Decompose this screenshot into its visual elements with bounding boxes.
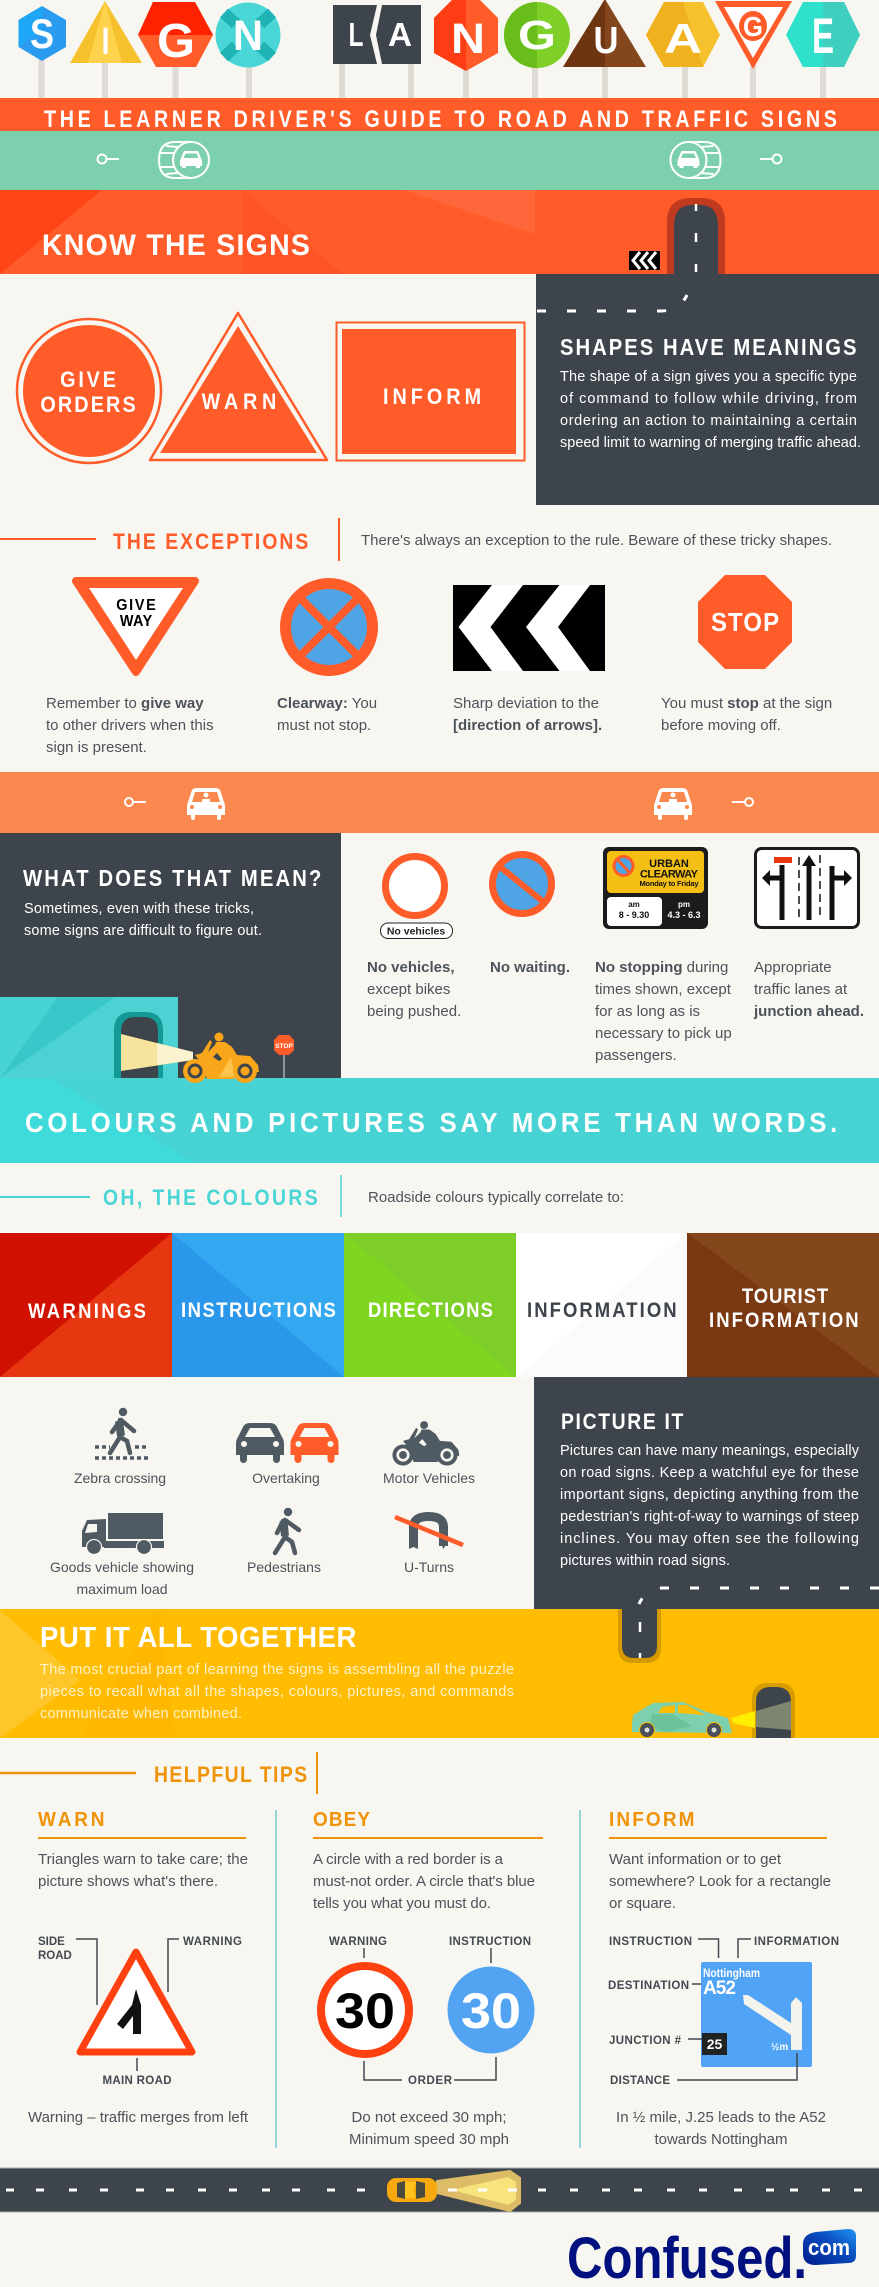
- speed sign labels: ORDER: [408, 2075, 453, 2087]
- road tunnel: [667, 198, 725, 274]
- sign: urban clearway: 4.3 - 6.3: [667, 910, 701, 920]
- orange band with car icons: [0, 772, 879, 833]
- sign captions: necessary to pick up: [595, 1025, 732, 1042]
- section heading: the exceptions: THE EXCEPTIONS: [113, 530, 309, 554]
- icon captions: Goods vehicle showing: [50, 1559, 194, 1575]
- column: inform: INFORM: [609, 1809, 695, 1831]
- panel: picture it: inclines. You may often see the following: [560, 1531, 859, 1547]
- sign: urban clearway: 8 - 9.30: [619, 910, 649, 920]
- column: inform: towards Nottingham: [654, 2131, 788, 2148]
- panel: tourist information: INFORMATION: [709, 1309, 859, 1332]
- sign: urban clearway: pm: [678, 900, 690, 909]
- column: warn: Warning – traffic merges from left: [28, 2109, 249, 2126]
- panel: what does that mean: some signs are difficult to figure out.: [24, 923, 262, 939]
- panel: tourist information: TOURIST: [742, 1285, 828, 1308]
- panel: what does that mean: WHAT DOES THAT MEAN?: [23, 865, 321, 891]
- exception: give way sign: WAY: [120, 612, 152, 630]
- small stop sign: STOP: [275, 1043, 293, 1050]
- icon: zebra crossing: [95, 1408, 148, 1458]
- column: inform: or square.: [609, 1895, 676, 1912]
- sign letter G: [138, 2, 213, 68]
- direction sign labels: DISTANCE: [610, 2075, 670, 2087]
- sign letter A: A: [388, 16, 412, 53]
- sign letter L: L: [348, 16, 364, 53]
- icon: motor vehicles: [392, 1421, 459, 1466]
- section banner: put it all together: The most crucial part of learning the signs is assembling all the puzzle: [40, 1662, 514, 1678]
- exception captions: [direction of arrows].: [453, 717, 602, 734]
- column: obey: [313, 1809, 543, 2148]
- tunnel and car: [632, 1683, 795, 1738]
- circle sign: give orders: GIVE: [60, 368, 116, 392]
- sign letter I: [70, 1, 142, 63]
- direction sign: A52: [703, 1978, 736, 1999]
- column: obey: tells you what you must do.: [313, 1895, 491, 1912]
- sign letter N: N: [233, 12, 263, 60]
- sign captions: being pushed.: [367, 1003, 461, 1020]
- exception: give way sign: [76, 581, 195, 672]
- sign: no vehicles: [380, 856, 452, 938]
- column: obey: A circle with a red border is a: [313, 1851, 504, 1868]
- icon captions: Motor Vehicles: [383, 1470, 475, 1486]
- sign captions: No waiting.: [490, 959, 570, 976]
- small stop sign: [274, 1035, 294, 1078]
- chevron road sign: [629, 251, 660, 270]
- sign letter N: [434, 0, 498, 71]
- body text: speed limit to warning of merging traffic ahead.: [560, 435, 861, 451]
- road with car: [0, 2168, 879, 2212]
- sign: urban clearway: CLEARWAY: [640, 868, 699, 880]
- exception captions: before moving off.: [661, 717, 781, 734]
- column: inform: [608, 1809, 839, 2148]
- section banner: put it all together: pieces to recall what all the shapes, colours, pictures, and commands: [40, 1684, 514, 1700]
- motorbike: [183, 1032, 259, 1083]
- warning sign labels: SIDE: [38, 1936, 65, 1948]
- column: warn: WARN: [38, 1809, 105, 1831]
- heading: SHAPES HAVE MEANINGS: [560, 334, 857, 360]
- sign letter L: [333, 5, 377, 64]
- direction sign labels: JUNCTION #: [609, 2035, 682, 2047]
- exception: give way sign: GIVE: [116, 596, 156, 614]
- icon captions: maximum load: [76, 1581, 168, 1597]
- triangle sign: warn: [150, 313, 327, 460]
- sign letter G: G: [743, 11, 763, 42]
- sign captions: passengers.: [595, 1047, 677, 1064]
- icon captions: [50, 1470, 475, 1597]
- body text: [560, 369, 861, 451]
- panel: picture it: [534, 1377, 879, 1609]
- icon: overtaking cars: [236, 1423, 338, 1463]
- sign letter E: [786, 2, 860, 67]
- warning triangle sign: [80, 1952, 192, 2052]
- direction sign labels: INFORMATION: [754, 1936, 839, 1948]
- sign: no waiting: [492, 854, 552, 914]
- triangle sign: warn: WARN: [202, 390, 276, 414]
- sign captions: junction ahead.: [753, 1003, 864, 1020]
- speed sign labels: WARNING: [329, 1936, 387, 1948]
- sign: no vehicles: No vehicles: [387, 926, 445, 938]
- sign captions: No stopping during: [595, 959, 728, 976]
- body text: ordering an action to maintaining a certain: [560, 413, 857, 429]
- subtitle banner: THE LEARNER DRIVER'S GUIDE TO ROAD AND TRAFFIC SIGNS: [44, 105, 837, 132]
- road end: [618, 1609, 661, 1663]
- section banner: Know the signs: [0, 190, 879, 274]
- section banner: put it all together: [0, 1609, 879, 1738]
- sign letter N: [216, 2, 280, 68]
- panel: information: [516, 1233, 687, 1377]
- section banner: put it all together: PUT IT ALL TOGETHER: [40, 1620, 356, 1653]
- exception captions: You must stop at the sign: [661, 695, 832, 712]
- circle sign: give orders: ORDERS: [40, 393, 136, 417]
- section heading: the exceptions: [0, 518, 832, 561]
- exception: chevron sign: [453, 585, 605, 671]
- sign letter U: U: [594, 20, 618, 62]
- column: warn: Triangles warn to take care; the: [38, 1851, 248, 1868]
- panel: picture it: PICTURE IT: [561, 1410, 684, 1434]
- panel: picture it: Pictures can have many meanings, especially: [560, 1443, 860, 1459]
- sign: urban clearway: URBAN: [649, 858, 689, 870]
- direction sign: Nottingham: [703, 1966, 760, 1980]
- column: obey: Minimum speed 30 mph: [349, 2131, 509, 2148]
- panel: what does that mean: Sometimes, even with these tricks,: [24, 901, 254, 917]
- sign captions: except bikes: [367, 981, 450, 998]
- icon captions: Zebra crossing: [74, 1470, 166, 1486]
- panel: information: INFORMATION: [527, 1299, 677, 1322]
- icon captions: Pedestrians: [247, 1559, 321, 1575]
- panel: directions: DIRECTIONS: [368, 1299, 493, 1322]
- direction sign: [701, 1962, 812, 2067]
- square sign: inform: [336, 322, 524, 460]
- sign captions: Appropriate: [754, 959, 832, 976]
- direction sign labels: [608, 1936, 839, 2087]
- column: obey: Do not exceed 30 mph;: [352, 2109, 506, 2126]
- exception captions: must not stop.: [277, 717, 371, 734]
- section banner: put it all together: communicate when combined.: [40, 1706, 242, 1722]
- sign letter G: G: [157, 15, 195, 68]
- column: obey: OBEY: [313, 1809, 370, 1831]
- colour panels: [0, 1233, 879, 1377]
- exception captions: Remember to give way: [46, 695, 204, 712]
- icon: goods vehicle: [82, 1513, 164, 1554]
- sign letter N: N: [451, 15, 485, 63]
- body text: The shape of a sign gives you a specific type: [560, 369, 857, 385]
- sign letter A: [376, 5, 421, 64]
- circle sign: give orders: [17, 319, 161, 463]
- warning sign labels: WARNING: [183, 1936, 242, 1948]
- column: inform: In ½ mile, J.25 leads to the A52: [616, 2109, 826, 2126]
- sign: urban clearway: am: [628, 900, 640, 909]
- panel: tourist information: [687, 1233, 879, 1377]
- speed limit sign: [321, 1966, 409, 2054]
- icon captions: Overtaking: [252, 1470, 320, 1486]
- panel: picture it: important signs, depicting anything from the: [560, 1487, 859, 1503]
- sign: urban clearway: [603, 847, 708, 929]
- warning sign labels: [38, 1936, 242, 2087]
- panel: what does that mean: [0, 833, 341, 1083]
- sign letter S: [18, 6, 66, 61]
- section heading: oh, the colours: [0, 1175, 624, 1217]
- direction sign labels: INSTRUCTION: [609, 1936, 692, 1948]
- column: inform: Want information or to get: [609, 1851, 782, 1868]
- sign letter G: [504, 2, 570, 68]
- section banner: colours and pictures: COLOURS AND PICTURES SAY MORE THAN WORDS.: [25, 1107, 837, 1138]
- exception captions: sign is present.: [46, 739, 147, 756]
- exception captions: Sharp deviation to the: [453, 695, 599, 712]
- exception captions: Clearway: You: [277, 695, 377, 712]
- sign letter E: E: [812, 8, 834, 64]
- section heading: helpful tips: HELPFUL TIPS: [154, 1763, 307, 1787]
- green band with tyre icons: [0, 131, 879, 190]
- icon captions: U-Turns: [404, 1559, 454, 1575]
- exception captions: [46, 695, 832, 756]
- minimum speed sign: 30: [461, 1983, 521, 2039]
- exception: clearway sign: [280, 578, 378, 676]
- title: Sign Language made of road signs: [18, 0, 860, 98]
- exception: stop sign: STOP: [711, 608, 779, 637]
- panel: instructions: [172, 1233, 344, 1377]
- section banner: Know the signs: KNOW THE SIGNS: [42, 229, 310, 262]
- sign captions: [367, 959, 864, 1064]
- direction sign: 25: [707, 2036, 722, 2052]
- column: obey: must-not order. A circle that's blue: [313, 1873, 535, 1890]
- sign: urban clearway: Monday to Friday: [640, 879, 699, 888]
- icon: pedestrian: [275, 1508, 299, 1553]
- warning sign labels: MAIN ROAD: [102, 2075, 172, 2087]
- direction sign labels: DESTINATION: [608, 1980, 689, 1992]
- section banner: colours and pictures: [0, 1078, 879, 1163]
- direction sign: ½m: [771, 2042, 788, 2053]
- three basic sign shapes: [17, 313, 524, 463]
- square sign: inform: INFORM: [383, 385, 481, 409]
- sign letter I: I: [102, 21, 110, 63]
- sign letter G: G: [518, 12, 556, 58]
- column: warn: [28, 1809, 249, 2126]
- speed sign labels: INSTRUCTION: [449, 1936, 531, 1948]
- sign captions: for as long as is: [595, 1003, 700, 1020]
- sign captions: times shown, except: [595, 981, 732, 998]
- sign letter U: [563, 0, 646, 67]
- body text: of command to follow while driving, from: [560, 391, 857, 407]
- scene: motorbike at tunnel: [0, 997, 294, 1083]
- panel: shapes have meanings: [536, 274, 879, 505]
- panel: picture it: pictures within road signs.: [560, 1553, 730, 1569]
- sign letter G: [715, 1, 792, 69]
- sign captions: No vehicles,: [367, 959, 455, 976]
- panel: picture it: pedestrian's right-of-way to warnings of steep: [560, 1509, 859, 1525]
- panel: directions: [344, 1233, 516, 1377]
- panel: warnings: WARNINGS: [28, 1300, 146, 1323]
- panel: warnings: [0, 1233, 172, 1377]
- column: inform: somewhere? Look for a rectangle: [609, 1873, 831, 1890]
- panel: picture it: on road signs. Keep a watchful eye for these: [560, 1465, 859, 1481]
- sign letter S: S: [30, 10, 54, 57]
- logo: Confused.com: com: [808, 2235, 850, 2260]
- minimum speed sign: [448, 1966, 534, 2054]
- section heading: oh, the colours: Roadside colours typically correlate to:: [368, 1189, 624, 1206]
- column: warn: picture shows what's there.: [38, 1873, 218, 1890]
- section heading: oh, the colours: OH, THE COLOURS: [103, 1186, 318, 1210]
- exception: stop sign: [698, 575, 792, 669]
- sign captions: traffic lanes at: [754, 981, 848, 998]
- sign letter A: [646, 2, 720, 67]
- panel: instructions: INSTRUCTIONS: [181, 1299, 336, 1322]
- sign letter A: A: [664, 15, 702, 62]
- sign: junction lanes: [756, 848, 858, 928]
- speed limit sign: 30: [335, 1983, 395, 2039]
- exception captions: to other drivers when this: [46, 717, 214, 734]
- warning sign labels: ROAD: [38, 1950, 72, 1962]
- section heading: the exceptions: There's always an exception to the rule. Beware of these tricky shapes.: [361, 532, 832, 549]
- speed sign labels: [329, 1936, 531, 2087]
- icon: no u-turn: [395, 1516, 463, 1549]
